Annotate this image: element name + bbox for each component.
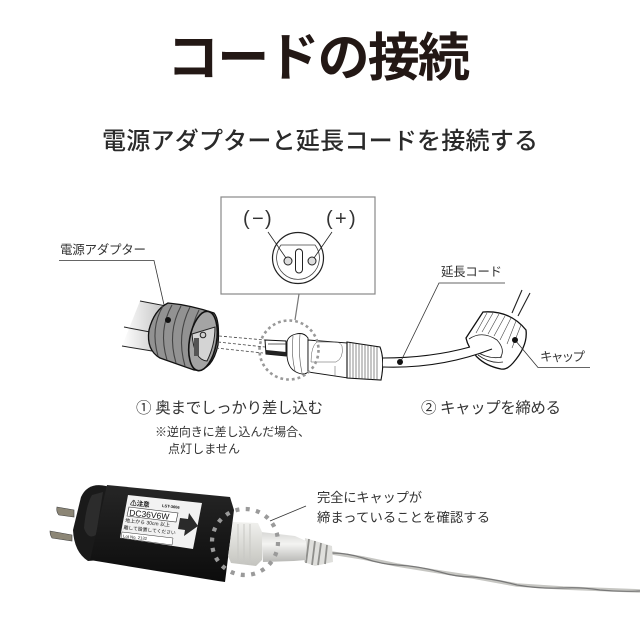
adapter label: LST-3606 <box>162 503 181 510</box>
step 1 note: 点灯しません <box>168 442 240 456</box>
label: cap: キャップ <box>540 350 585 364</box>
illustration: power adapter socket <box>122 301 222 373</box>
label: extension cord <box>397 265 505 365</box>
adapter label: Lot No. 2132 <box>123 534 148 541</box>
photo: power adapter with label <box>50 485 333 582</box>
photo callout text: 締まっていることを確認する <box>317 510 490 525</box>
adapter label: 離して設置してください <box>123 524 176 536</box>
leader: inset to connector <box>295 294 299 320</box>
illustration: extension cord and cap <box>383 290 530 369</box>
label: power adapter: 電源アダプター <box>60 242 146 257</box>
step 1 note: ※逆向きに差し込んだ場合、 <box>155 424 310 439</box>
inset: plug pin diagram: (+) <box>326 208 356 230</box>
alignment dashed lines <box>216 336 265 353</box>
label: power adapter <box>59 242 167 318</box>
step 1 caption: ① 奥までしっかり差し込む <box>136 399 323 417</box>
photo callout text: 完全にキャップが <box>317 490 422 505</box>
callout circle on connector <box>260 320 318 380</box>
photo callout text <box>317 490 490 525</box>
illustration: extension cord connector <box>265 334 383 380</box>
step 2 caption: ② キャップを締める <box>421 399 561 417</box>
label: cap <box>512 337 590 368</box>
adapter label <box>120 495 202 549</box>
subtitle: 電源アダプターと延長コードを接続する <box>102 128 538 155</box>
adapter label: ⚠注意 <box>130 498 151 509</box>
white connector <box>304 538 333 566</box>
adapter label: 地上から 30cm 以上 <box>125 517 170 529</box>
step 1 note <box>155 424 310 456</box>
title: コードの接続 <box>167 30 470 88</box>
photo callout leader <box>270 506 306 521</box>
label: extension cord: 延長コード <box>441 265 502 279</box>
callout circle on photo <box>212 509 278 575</box>
photo: silver cable <box>332 553 640 591</box>
inset: plug pin diagram <box>221 197 375 294</box>
inset: plug pin diagram: (−) <box>243 208 272 230</box>
adapter label: DC36V6W <box>129 508 170 522</box>
